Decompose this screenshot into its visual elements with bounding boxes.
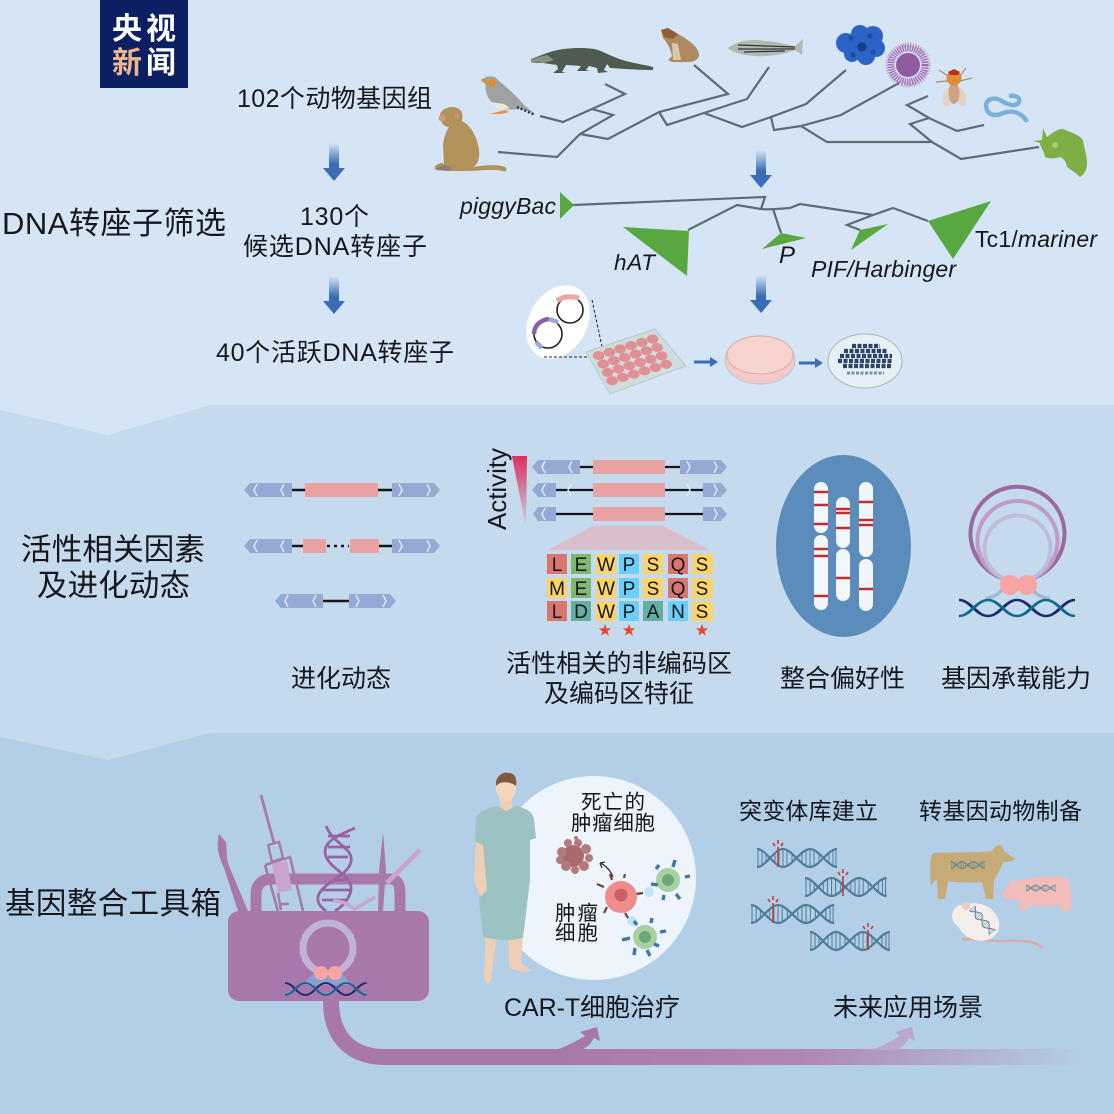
label: activity-related features: 及编码区特征 [544,680,694,708]
chart: amino-acid alignment: W [597,555,615,576]
diagram: activity gradient [482,448,527,530]
text block: 130 candidates [243,203,427,261]
arrow: tumor cell dies [600,862,613,877]
label: integration preference: 整合偏好性 [780,665,905,693]
chart: amino-acid alignment: S [696,602,708,623]
label: transgenic animals: 转基因动物制备 [919,798,1082,824]
text block: 130 candidates: 130个 [300,203,369,231]
icon: monkey [435,107,506,171]
icon: transgenic cow [930,845,1015,899]
chart: amino-acid alignment: P [623,602,635,623]
arrow: plate to dish [694,357,718,367]
label: tumor cells: 肿瘤 [555,902,598,925]
icon: plasmids [513,274,604,370]
heading: activity factors and evolution: 及进化动态 [37,569,190,603]
text block: 102 animal genomes: 102个动物基因组 [237,85,432,113]
icon: zebra finch [481,76,536,115]
arrow: toolbox to applications [331,1001,1085,1057]
chart: amino-acid alignment: D [574,602,588,623]
background: section 2 [0,405,1114,770]
chart: amino-acid alignment: W [597,602,615,623]
label: PIF/Harbinger clade [811,224,957,282]
heading: DNA transposon screening: DNA转座子筛选 [2,206,226,241]
label: dead tumor cells [571,791,655,835]
label: tumor cells [555,902,598,945]
label: tumor cells: 细胞 [555,922,598,945]
label: P clade: P [779,242,795,269]
chart: amino-acid alignment: S [647,579,659,600]
diagram: non-coding region elements [532,460,727,550]
chart: amino-acid alignment: P [623,555,635,576]
chart: amino-acid alignment: Q [671,579,685,600]
icon: transgenic pig [1001,876,1071,911]
heading: gene integration toolbox: 基因整合工具箱 [5,887,221,921]
label: cargo capacity: 基因承载能力 [941,665,1091,693]
chart: amino-acid alignment: M [549,579,565,600]
arrow: families to assay [750,275,772,313]
icon: pink culture dish [725,336,795,384]
background: section 3 [0,733,1114,1114]
label: dead tumor cells: 死亡的 [581,791,645,814]
label: activity-related features: 活性相关的非编码区 [506,650,732,678]
heading: activity factors and evolution: 活性相关因素 [21,533,205,567]
chart: amino-acid alignment: L [552,555,562,576]
chart: amino-acid alignment: L [552,602,562,623]
logo: CCTV news: 央视 [112,13,176,46]
icon: sea lettuce [1033,128,1087,177]
icon: dead tumor cell [556,836,593,874]
chart: amino-acid alignment [547,554,713,636]
label: activity-related features [506,650,732,708]
label: P clade [762,233,806,269]
chart: amino-acid alignment: S [647,555,659,576]
chart: transposon family tree [573,197,928,233]
chart: amino-acid alignment: Q [671,555,685,576]
label: future applications: 未来应用场景 [833,994,983,1022]
icon: stained colony dish [828,334,902,388]
text block: 40 active transposons: 40个活跃DNA转座子 [216,339,454,367]
icon: fruit fly [936,68,972,108]
icon: frog [661,28,699,62]
logo: CCTV news [100,0,188,88]
logo: CCTV news: 新 [112,47,142,80]
heading: activity factors and evolution [21,533,205,603]
icon: sea urchin [887,44,929,86]
icon: sponge [836,25,885,65]
label: piggyBac clade: piggyBac [459,193,556,219]
label: hAT clade [614,227,689,276]
chart: amino-acid alignment: E [575,579,587,600]
label: PIF/Harbinger clade: PIF/Harbinger [811,256,957,282]
diagram: cargo capacity [959,487,1075,616]
chart: amino-acid alignment: W [597,579,615,600]
diagram: activity gradient: Activity [482,448,512,530]
chart: amino-acid alignment: S [696,579,708,600]
label: hAT clade: hAT [614,250,657,275]
panel: CAR-T therapy [474,773,696,983]
label: Tc1/mariner clade [928,201,1098,259]
icon: toolbox with tools [218,795,429,1001]
logo: CCTV news: 闻 [146,47,176,80]
icon: worm [986,96,1027,122]
chart: amino-acid alignment: S [696,555,708,576]
diagram: evolution dynamics [244,483,440,608]
background: section 1 [0,0,1114,440]
arrow: tree to families [750,150,772,188]
arrow: dish to stained dish [799,358,823,368]
icon: patient in gown [474,773,536,983]
icon: CAR-T cells [622,860,690,956]
icon: tumor cell [597,874,654,926]
label: dead tumor cells: 肿瘤细胞 [571,812,655,835]
chart: amino-acid alignment: P [623,579,635,600]
arrow: flow down 2 [323,276,345,314]
icon: crocodile [531,48,653,73]
chart: amino-acid alignment: N [671,602,685,623]
label: CAR-T cell therapy: CAR-T细胞治疗 [504,994,680,1022]
icon: transgenic mouse [950,896,1042,949]
label: evolution dynamics: 进化动态 [291,665,391,693]
diagram: chromosomes in nucleus [776,455,911,637]
chart: amino-acid alignment: E [575,555,587,576]
arrow: flow down 1 [323,143,345,181]
chart: animal phylogenetic tree [498,65,1039,159]
label: Tc1/mariner clade: Tc1/mariner [975,226,1098,252]
label: mutant library: 突变体库建立 [739,798,878,824]
text block: 130 candidates: 候选DNA转座子 [243,233,427,261]
chart: amino-acid alignment: A [647,602,660,623]
icon: zebrafish [728,39,803,56]
icon: 24-well plate [586,329,686,394]
icon: mutant DNA helices [751,840,890,950]
